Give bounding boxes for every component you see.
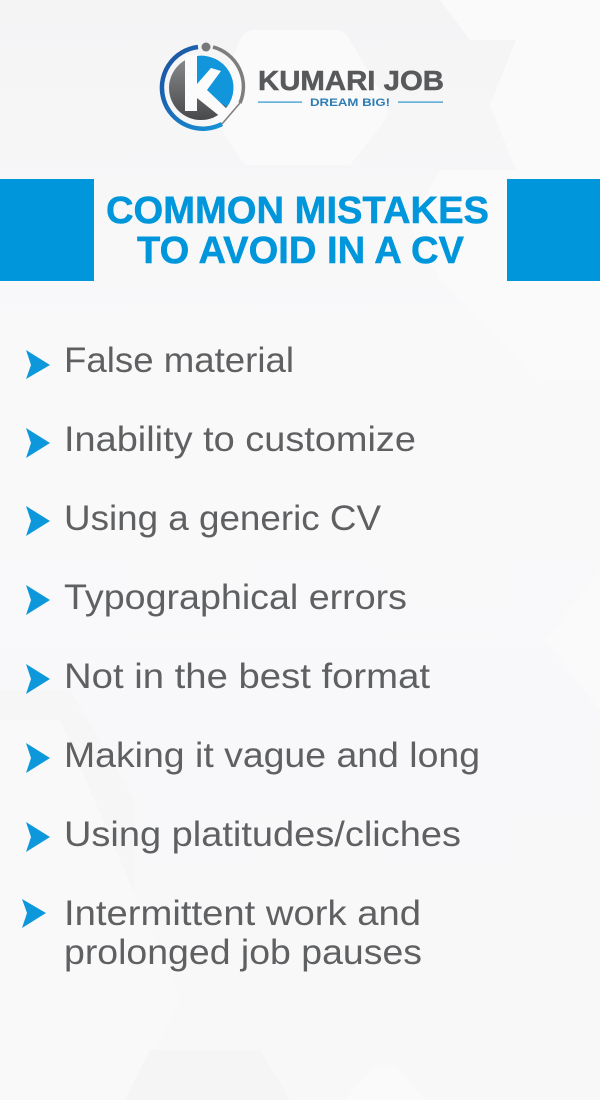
brand name: KUMARI JOB <box>258 65 444 96</box>
item 1: False material <box>64 341 294 380</box>
icon: K logo mark <box>162 42 243 129</box>
item 8: Intermittent work and <box>64 894 421 933</box>
item 5: Not in the best format <box>64 657 430 696</box>
tagline: DREAM BIG! <box>310 97 390 109</box>
item 2: Inability to customize <box>64 420 416 459</box>
item 8: prolonged job pauses <box>64 933 422 972</box>
banner: right block <box>507 179 600 281</box>
banner: left block <box>0 179 94 281</box>
item 6: Making it vague and long <box>64 736 480 775</box>
item 3: Using a generic CV <box>64 499 382 538</box>
logo <box>162 42 444 129</box>
title: COMMON MISTAKES <box>106 190 489 232</box>
item 7: Using platitudes/cliches <box>64 815 461 854</box>
list of mistakes <box>22 341 480 972</box>
title: TO AVOID IN A CV <box>137 230 465 272</box>
item 8 <box>22 894 422 972</box>
item 4: Typographical errors <box>64 578 407 617</box>
title <box>106 190 489 272</box>
